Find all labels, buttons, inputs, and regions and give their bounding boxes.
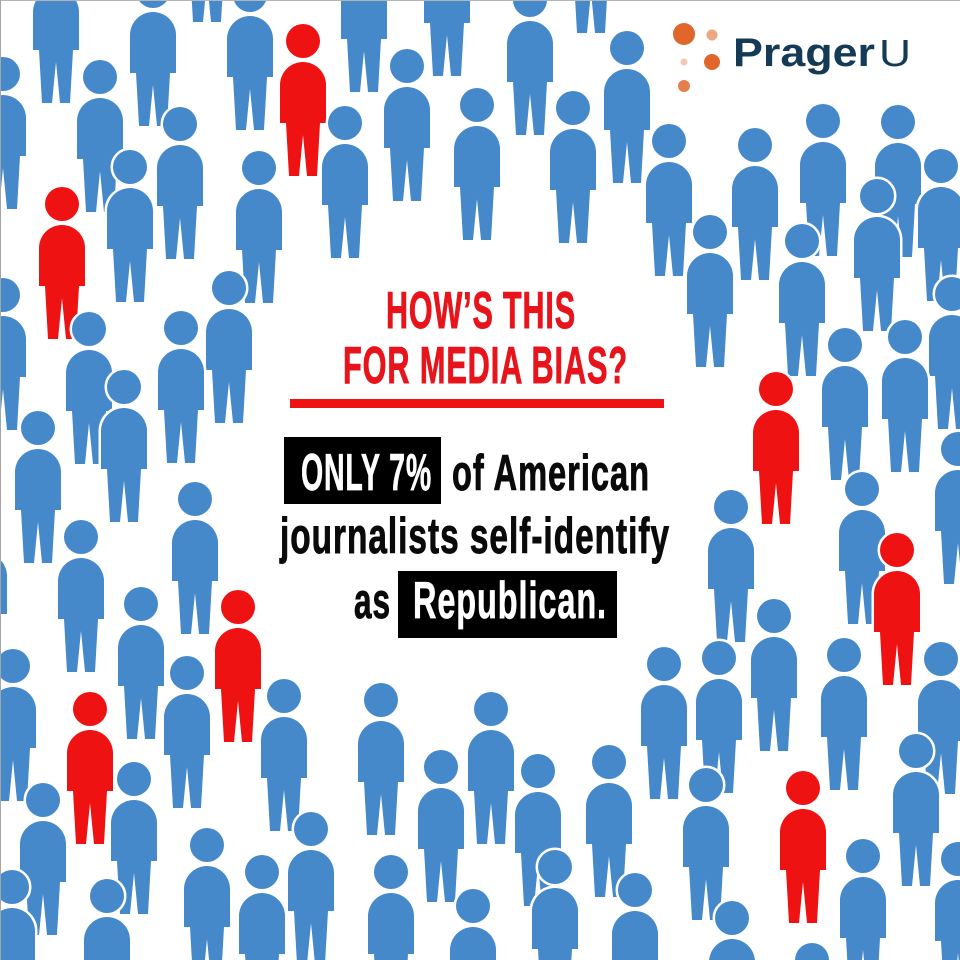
heading: HOW’S THIS (386, 282, 576, 340)
red figure (215, 590, 261, 742)
logo: PragerU (673, 23, 911, 92)
red divider rule (290, 399, 664, 408)
highlight box: Republican (398, 571, 617, 638)
logo: PragerU: Prager (733, 31, 875, 75)
red figure (67, 692, 113, 844)
text: Republican: Republican. (413, 572, 607, 630)
red figure (39, 187, 85, 339)
red figure (753, 372, 799, 524)
highlight box: only 7% (284, 437, 441, 504)
text: journalists self-identify: journalists self-identify (279, 508, 670, 564)
red figure (874, 533, 920, 685)
statement text (279, 437, 670, 638)
red figure (780, 771, 826, 923)
heading: FOR MEDIA BIAS? (343, 337, 628, 395)
text: only 7%: ONLY 7% (301, 444, 432, 502)
heading (343, 282, 628, 395)
text: of American: of American (452, 445, 650, 501)
red figure (280, 24, 326, 176)
text: as: as (354, 573, 391, 629)
logo: PragerU: U (879, 33, 911, 75)
